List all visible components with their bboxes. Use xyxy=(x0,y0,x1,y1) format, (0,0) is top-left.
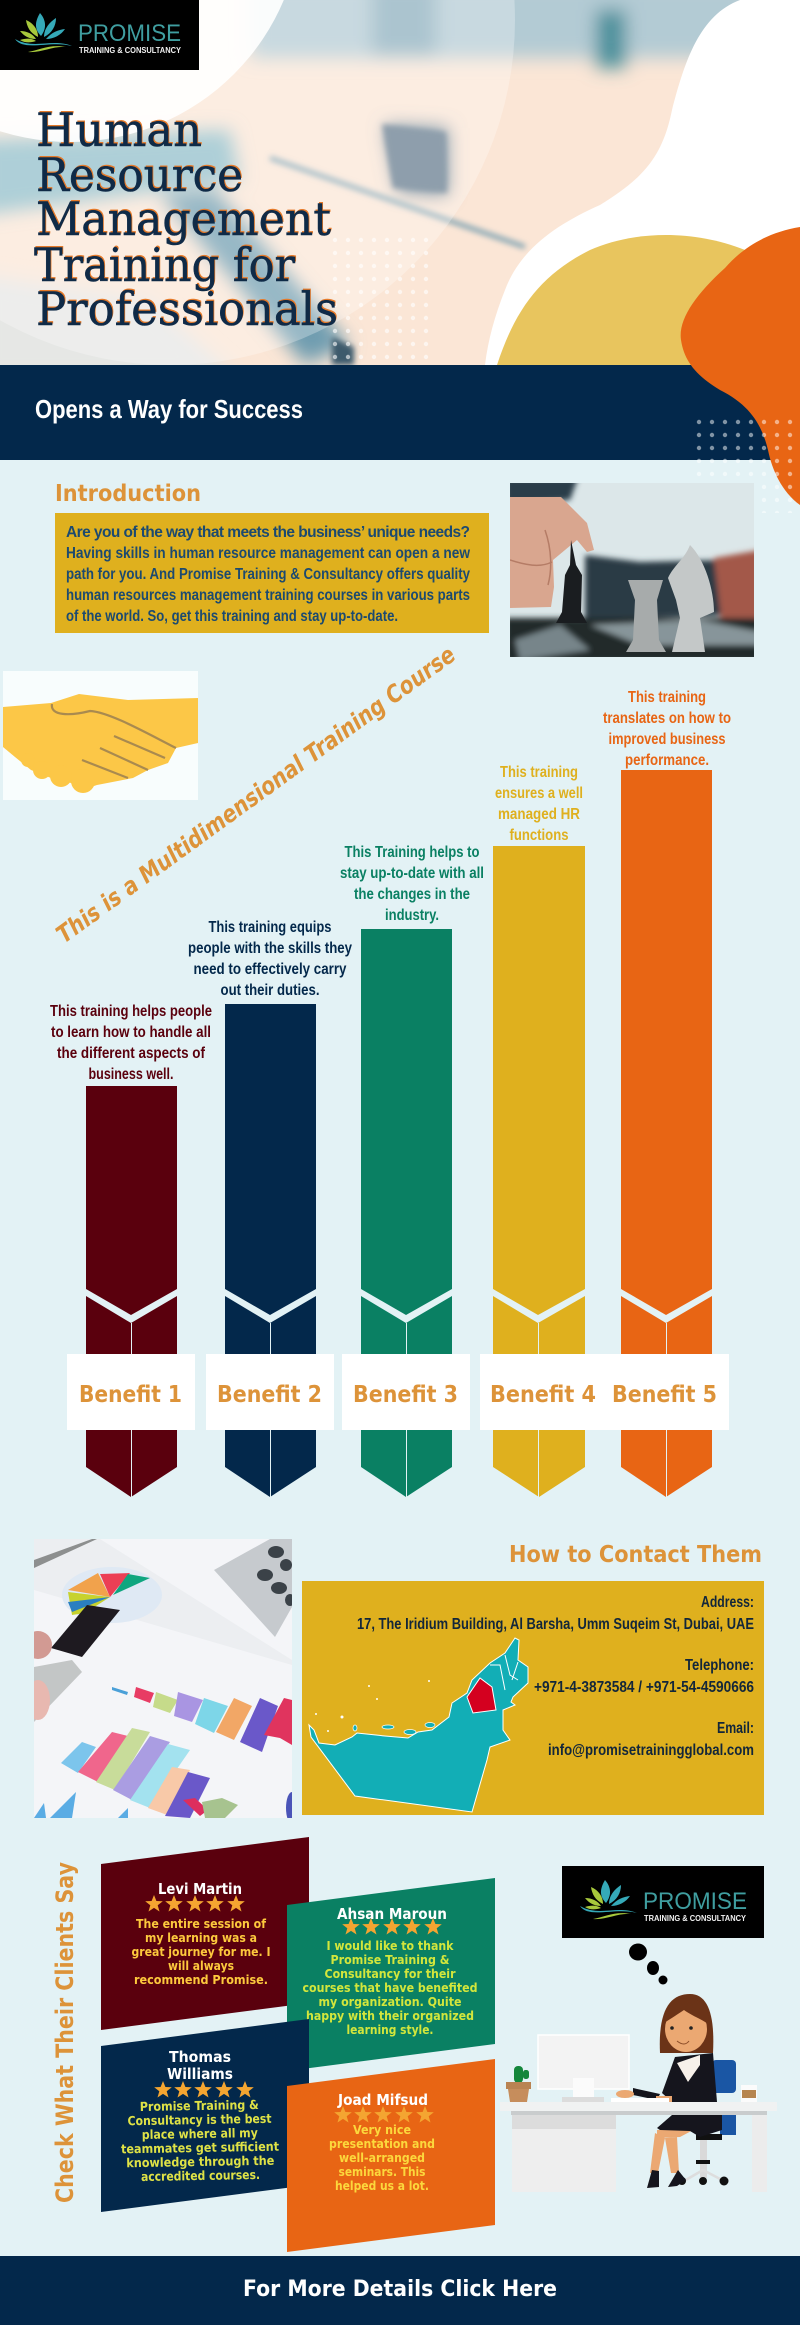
review text: my organization. Quite xyxy=(318,1994,462,2009)
chart: benefit 5 ribbon xyxy=(621,770,712,1497)
icon: handshake xyxy=(3,671,198,800)
review text: I would like to thank xyxy=(326,1938,454,1953)
benefit labels: Benefit 5 xyxy=(612,1382,717,1408)
review text: Consultancy is the best xyxy=(127,2111,272,2128)
illustration: woman at desk xyxy=(500,1994,777,2192)
benefit 3 text: This Training helps to xyxy=(344,844,480,861)
chart: benefit 3 ribbon xyxy=(361,929,452,1497)
main title: Resource xyxy=(37,146,244,200)
main title: Resource xyxy=(36,148,243,202)
review text xyxy=(302,1938,478,2037)
benefit 2 text xyxy=(188,919,352,999)
benefit 1 text: business well. xyxy=(88,1066,174,1083)
introduction paragraph: path for you. And Promise Training & Consultancy offers quality xyxy=(66,566,470,583)
star rating xyxy=(342,1918,442,1934)
review text: well-arranged xyxy=(339,2150,425,2165)
review text: Very nice xyxy=(353,2122,411,2137)
subtitle: Opens a Way for Success xyxy=(35,394,303,424)
review text xyxy=(132,1916,270,1987)
review text: Promise Training & xyxy=(330,1952,450,1967)
benefit labels: Benefit 3 xyxy=(353,1382,458,1408)
reviewer name xyxy=(167,2048,233,2083)
star rating xyxy=(334,2106,434,2122)
chart: benefit 2 ribbon xyxy=(225,1004,316,1497)
woman xyxy=(616,1994,722,2188)
benefit 4 text: ensures a well xyxy=(495,785,583,802)
benefit 4 text: managed HR xyxy=(498,806,580,823)
benefit 4 text xyxy=(495,764,583,844)
white wave shape xyxy=(485,0,800,365)
heading: introduction: Introduction xyxy=(55,481,201,507)
map: UAE xyxy=(309,1638,528,1812)
review text xyxy=(329,2122,435,2193)
testimonial: Levi Martin xyxy=(101,1837,309,2030)
pie chart xyxy=(62,1567,162,1623)
panel: contact details xyxy=(302,1581,764,1815)
reviewer name: Joad Mifsud xyxy=(337,2091,428,2109)
main title: Training for xyxy=(35,236,296,290)
benefit 5 text: translates on how to xyxy=(603,710,731,727)
call to action: For More Details Click Here xyxy=(243,2277,557,2302)
benefit 1 text: the different aspects of xyxy=(57,1045,206,1062)
reviewer name: Ahsan Maroun xyxy=(337,1905,447,1923)
review text: place where all my xyxy=(142,2125,258,2142)
cactus xyxy=(506,2066,531,2102)
introduction paragraph: Having skills in human resource management can open a new xyxy=(66,545,471,562)
benefit label boxes xyxy=(67,1354,729,1430)
benefit 3 text xyxy=(340,844,484,924)
reviewer name: Thomas xyxy=(169,2048,231,2066)
benefit 2 text: This training equips xyxy=(208,919,332,936)
benefit 2 text: need to effectively carry xyxy=(194,961,347,978)
introduction paragraph: Are you of the way that meets the business’ unique needs? xyxy=(66,524,470,541)
chart: benefit 1 ribbon xyxy=(86,1086,177,1497)
benefit 3 text: industry. xyxy=(385,907,439,924)
diagonal heading: This is a Multidimensional Training Course xyxy=(51,641,461,949)
chair xyxy=(678,2060,736,2186)
logo wordmark: PROMISE xyxy=(643,1888,747,1915)
main title: Professionals xyxy=(36,282,338,336)
testimonial: Joad Mifsud xyxy=(287,2059,495,2252)
review text: teammates get sufficient xyxy=(121,2139,279,2156)
main title xyxy=(34,102,339,336)
benefit 1 text: to learn how to handle all xyxy=(51,1024,211,1041)
benefit 5 text: This training xyxy=(628,689,706,706)
coffee cup xyxy=(741,2085,757,2102)
contact lines: info@promisetrainingglobal.com xyxy=(548,1742,754,1759)
star rating xyxy=(145,1895,245,1912)
contact lines: Address: xyxy=(701,1594,754,1611)
review text: Consultancy for their xyxy=(324,1966,456,1981)
main title: Management xyxy=(37,190,332,244)
benefit 5 text: improved business xyxy=(608,731,726,748)
review text: great journey for me. I xyxy=(132,1944,270,1959)
logo tagline: TRAINING & CONSULTANCY xyxy=(79,46,182,55)
logo: top left xyxy=(0,0,199,70)
benefit 4 text: functions xyxy=(510,827,568,844)
navy subtitle band xyxy=(0,365,800,460)
main title: Professionals xyxy=(37,280,339,334)
main title: Human xyxy=(36,103,202,157)
3d bars upper xyxy=(112,1687,292,1752)
review text: helped us a lot. xyxy=(335,2178,429,2193)
dot grid on hero xyxy=(332,237,436,365)
review text: Promise Training & xyxy=(140,2097,259,2114)
benefit 4 text: This training xyxy=(500,764,578,781)
review text: recommend Promise. xyxy=(134,1972,268,1987)
benefit 2 text: out their duties. xyxy=(220,982,320,999)
review text: learning style. xyxy=(346,2022,434,2037)
review text: seminars. This xyxy=(338,2164,426,2179)
benefit labels: Benefit 4 xyxy=(490,1382,596,1408)
benefit 3 text: the changes in the xyxy=(354,886,470,903)
benefit labels xyxy=(79,1382,717,1408)
review text xyxy=(120,2097,280,2184)
orange blob xyxy=(681,227,800,505)
3d bars lower xyxy=(61,1728,238,1818)
heading: how to contact: How to Contact Them xyxy=(509,1542,762,1568)
testimonial: Ahsan Maroun xyxy=(287,1878,495,2071)
review text: happy with their organized xyxy=(306,2008,474,2023)
footer band xyxy=(0,2256,800,2325)
benefit 3 text: stay up-to-date with all xyxy=(340,865,484,882)
review text: presentation and xyxy=(329,2136,435,2151)
main title: Management xyxy=(36,192,331,246)
photo: business charts xyxy=(24,1539,298,1824)
vertical heading: clients: Check What Their Clients Say xyxy=(51,1862,79,2203)
thought bubbles xyxy=(629,1944,668,1984)
review text: will always xyxy=(168,1958,234,1973)
contact lines: Email: xyxy=(717,1720,754,1737)
photo: chess xyxy=(505,478,760,662)
review text: accredited courses. xyxy=(141,2167,260,2184)
main title: Human xyxy=(37,102,203,156)
desk xyxy=(500,2098,777,2192)
benefit 1 text xyxy=(50,1003,212,1083)
benefit 5 text xyxy=(603,689,731,769)
hero photo background xyxy=(0,0,740,365)
chart: benefit 4 ribbon xyxy=(493,846,585,1497)
benefit labels: Benefit 1 xyxy=(79,1382,182,1408)
introduction paragraph xyxy=(66,524,471,625)
logo wordmark: PROMISE xyxy=(78,20,181,47)
benefit 2 text: people with the skills they xyxy=(188,940,352,957)
introduction paragraph: of the world. So, get this training and stay up-to-date. xyxy=(66,608,398,625)
dot grid on band xyxy=(696,413,800,513)
review text: courses that have benefited xyxy=(302,1980,478,1995)
reviewer name: Williams xyxy=(167,2065,233,2083)
logo: thought bubble xyxy=(562,1866,764,1938)
monitor xyxy=(538,2035,629,2102)
benefit 5 text: performance. xyxy=(625,752,709,769)
benefit 1 text: This training helps people xyxy=(50,1003,212,1020)
main title: Training for xyxy=(34,238,295,292)
yellow blob xyxy=(497,235,760,365)
benefit labels: Benefit 2 xyxy=(217,1382,322,1408)
star rating xyxy=(154,2081,254,2098)
icon: lotus xyxy=(580,1880,637,1919)
review text: my learning was a xyxy=(145,1930,257,1945)
icon: lotus xyxy=(15,13,72,52)
introduction paragraph: human resources management training courses in various parts xyxy=(66,587,470,604)
panel: introduction text xyxy=(55,513,489,633)
contact lines xyxy=(357,1594,754,1759)
review text: The entire session of xyxy=(136,1916,266,1931)
review text: knowledge through the xyxy=(126,2153,274,2170)
logo tagline: TRAINING & CONSULTANCY xyxy=(644,1914,747,1923)
contact lines: Telephone: xyxy=(685,1657,754,1674)
testimonial: Thomas Williams xyxy=(101,2019,309,2212)
reviewer name: Levi Martin xyxy=(158,1880,242,1898)
contact lines: +971-4-3873584 / +971-54-4590666 xyxy=(534,1679,754,1696)
